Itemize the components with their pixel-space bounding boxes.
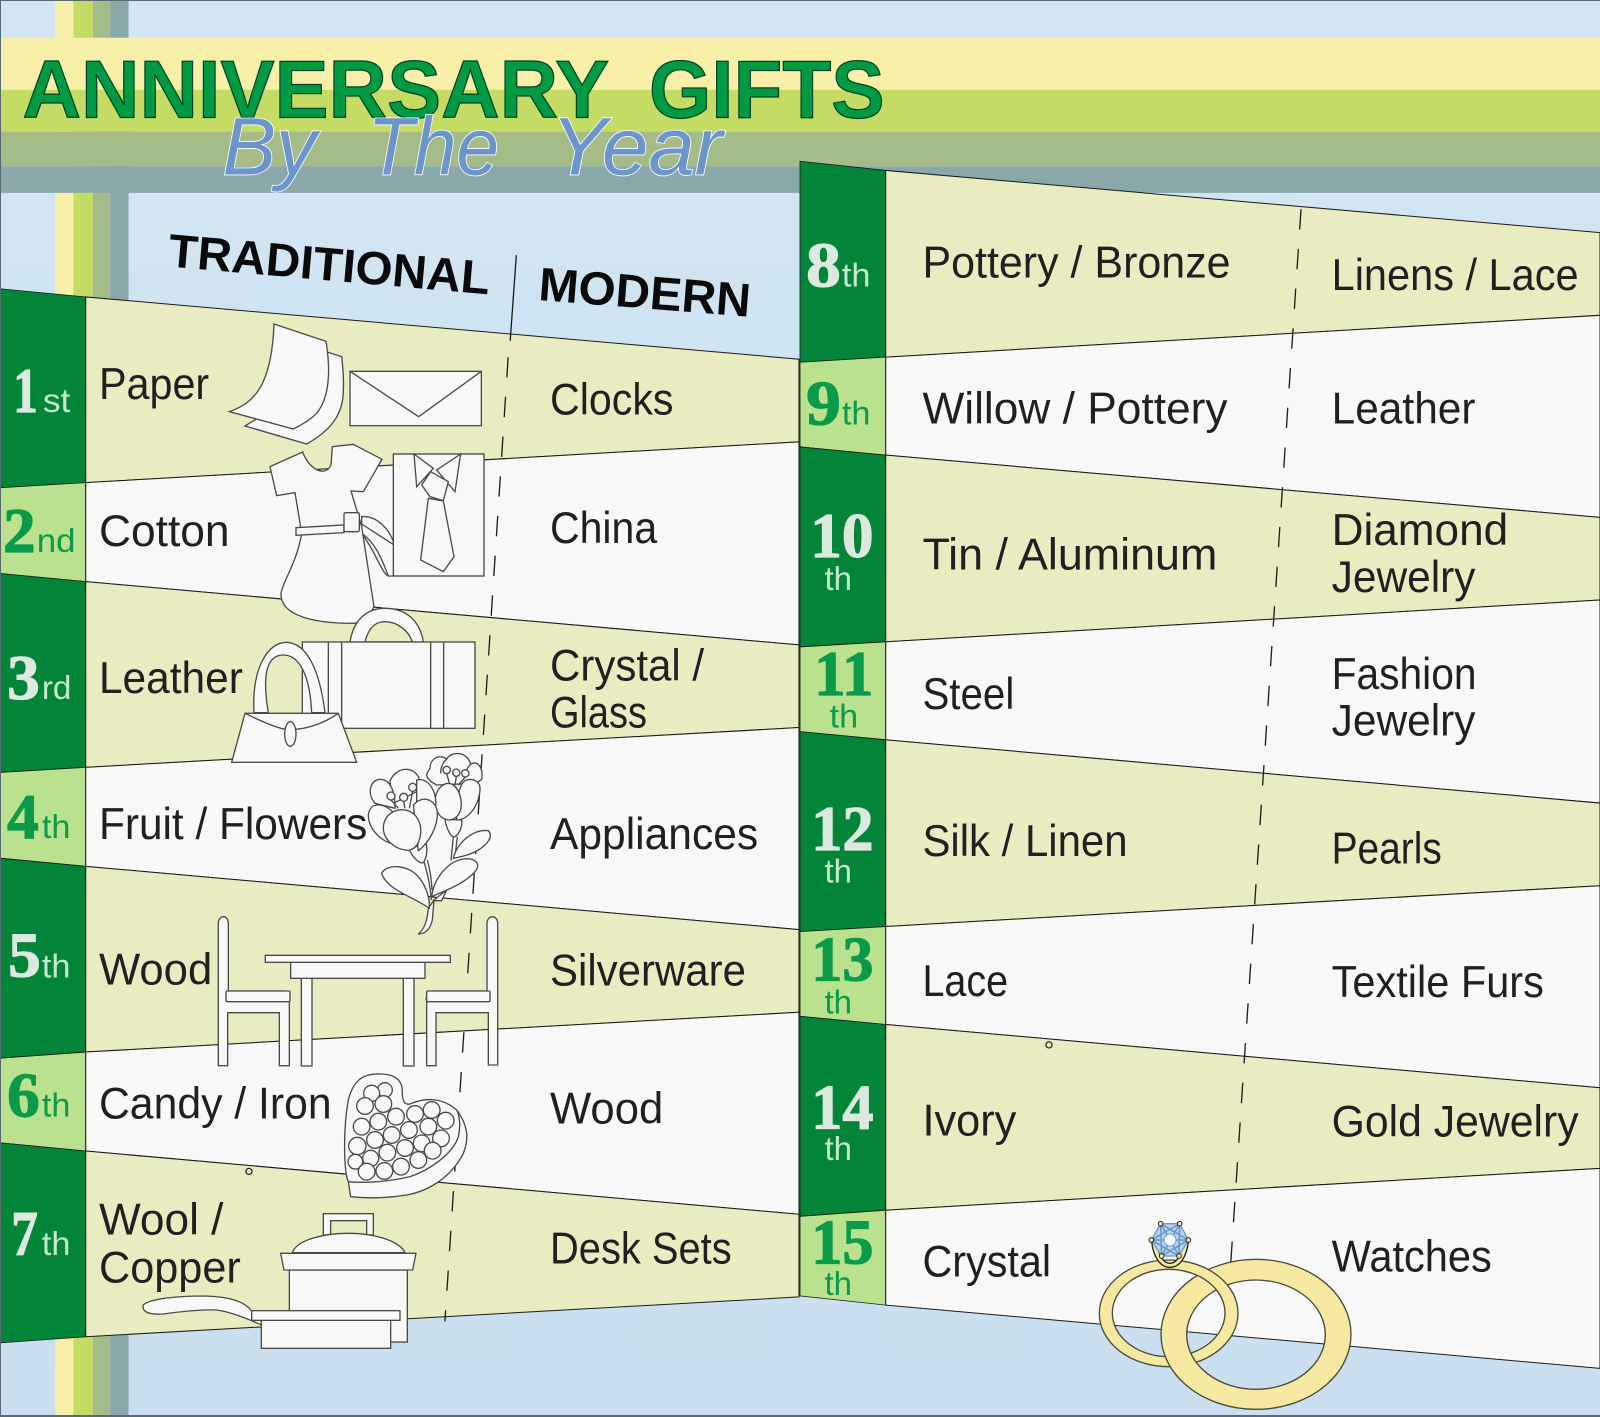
subtitle: Year (551, 101, 725, 192)
icon: heart candy box (345, 1074, 467, 1198)
row: 13th (800, 886, 1600, 1088)
row: 1st: Paper (99, 358, 209, 409)
column heading: traditional: TRADITIONAL (166, 224, 492, 304)
subtitle (222, 101, 725, 192)
row: 12th: 12 (811, 794, 873, 864)
vertical stripes (55, 0, 129, 1417)
right column divider (1231, 209, 1301, 1265)
icon: shirt and tie (362, 454, 484, 576)
title: GIFTS (649, 44, 885, 135)
row: 4th: th (42, 809, 70, 846)
row: 7th: 7 (11, 1199, 38, 1269)
row: 13th: Lace (922, 955, 1008, 1006)
row: 11th: th (830, 699, 858, 736)
icon: suitcase (302, 608, 475, 728)
row: 2nd: Cotton (99, 505, 230, 556)
row: 7th: Copper (99, 1242, 241, 1293)
row: 7th (0, 1143, 799, 1343)
row: 3rd (0, 573, 799, 772)
row: 15th: th (824, 1266, 852, 1303)
row: 5th: Silverware (550, 945, 746, 996)
row: 10th: th (824, 561, 852, 598)
row: 14th: 14 (811, 1073, 873, 1143)
row: 8th: 8 (806, 231, 841, 301)
row: 13th: Textile Furs (1332, 956, 1544, 1007)
row: 8th: Linens / Lace (1332, 249, 1579, 300)
row: 1st: 1 (13, 356, 38, 426)
row: 15th (800, 1168, 1600, 1368)
row: 12th: th (824, 854, 852, 891)
row: 7th: Desk Sets (550, 1222, 732, 1273)
row: 3rd: Leather (99, 652, 243, 703)
row: 6th: Wood (550, 1082, 663, 1133)
row: 15th: Crystal (922, 1236, 1051, 1287)
row: 4th (0, 728, 799, 930)
row: 14th: Gold Jewelry (1332, 1096, 1579, 1147)
left column divider (445, 255, 516, 1321)
row: 6th: Candy / Iron (99, 1077, 332, 1128)
row: 11th: Steel (922, 668, 1014, 719)
row: 4th: 4 (7, 782, 39, 852)
row: 13th: th (824, 984, 852, 1021)
icon: pot and pan (143, 1214, 416, 1348)
row: 2nd: nd (37, 523, 76, 560)
row: 8th (800, 161, 1600, 362)
icon: table and chairs (218, 917, 498, 1066)
row: 8th: Pottery / Bronze (922, 237, 1231, 288)
row: 11th (800, 600, 1600, 803)
title (22, 44, 885, 135)
row: 11th: Jewelry (1332, 695, 1476, 746)
row: 12th (800, 732, 1600, 932)
icon: dress (270, 444, 382, 623)
row: 9th: Willow / Pottery (922, 382, 1228, 433)
row: 3rd: 3 (7, 643, 40, 713)
row: 10th: Diamond (1332, 504, 1508, 555)
row: 6th: th (42, 1087, 70, 1124)
row: 2nd (0, 442, 799, 645)
row: 6th: 6 (7, 1060, 40, 1130)
icon: wedding rings with diamond (1099, 1221, 1351, 1409)
subtitle: The (367, 101, 499, 192)
icon: paper and envelope (229, 324, 481, 444)
row: 11th: 11 (814, 639, 873, 709)
row: 4th: Fruit / Flowers (99, 798, 367, 849)
row: 7th: Wool / (99, 1194, 224, 1245)
column heading: modern: MODERN (537, 258, 753, 327)
row: 14th: th (824, 1131, 852, 1168)
row: 3rd: Crystal / (550, 640, 705, 691)
row: 9th (800, 315, 1600, 517)
row: 1st (0, 289, 799, 488)
row: 4th: Appliances (550, 808, 758, 859)
row: 15th: Watches (1332, 1230, 1492, 1281)
row: 10th (800, 447, 1600, 647)
row: 10th: Jewelry (1332, 551, 1476, 602)
row: 13th: 13 (811, 925, 873, 995)
row: 10th: 10 (810, 501, 873, 571)
row: 10th: Tin / Aluminum (922, 528, 1217, 579)
row: 1st: st (43, 383, 71, 420)
row: 5th: th (42, 949, 70, 986)
row: 6th (0, 1012, 799, 1214)
row: 9th: 9 (806, 368, 841, 438)
row: 5th: Wood (99, 944, 212, 995)
row: 7th: th (42, 1226, 70, 1263)
row: 12th: Silk / Linen (922, 815, 1128, 866)
row: 2nd: 2 (3, 496, 36, 566)
row: 9th: Leather (1332, 382, 1476, 433)
icon: flowers (368, 754, 490, 934)
row: 8th: th (842, 258, 870, 295)
title: ANNIVERSARY (22, 44, 609, 135)
row: 11th: Fashion (1332, 648, 1477, 699)
row: 2nd: China (550, 502, 657, 553)
row: 15th: 15 (811, 1207, 873, 1277)
row: 14th: Ivory (922, 1095, 1017, 1146)
row: 5th: 5 (8, 921, 41, 991)
row: 12th: Pearls (1332, 822, 1442, 873)
subtitle: By (222, 101, 320, 192)
horizontal header bands (0, 38, 1600, 193)
row: 14th (800, 1016, 1600, 1216)
row: 3rd: rd (42, 670, 71, 707)
row: 9th: th (842, 395, 870, 432)
small circle marks (246, 1042, 1052, 1174)
row: 1st: Clocks (550, 373, 673, 424)
row: 5th (0, 858, 799, 1058)
icon: handbag (232, 642, 357, 762)
row: 3rd: Glass (550, 687, 647, 738)
